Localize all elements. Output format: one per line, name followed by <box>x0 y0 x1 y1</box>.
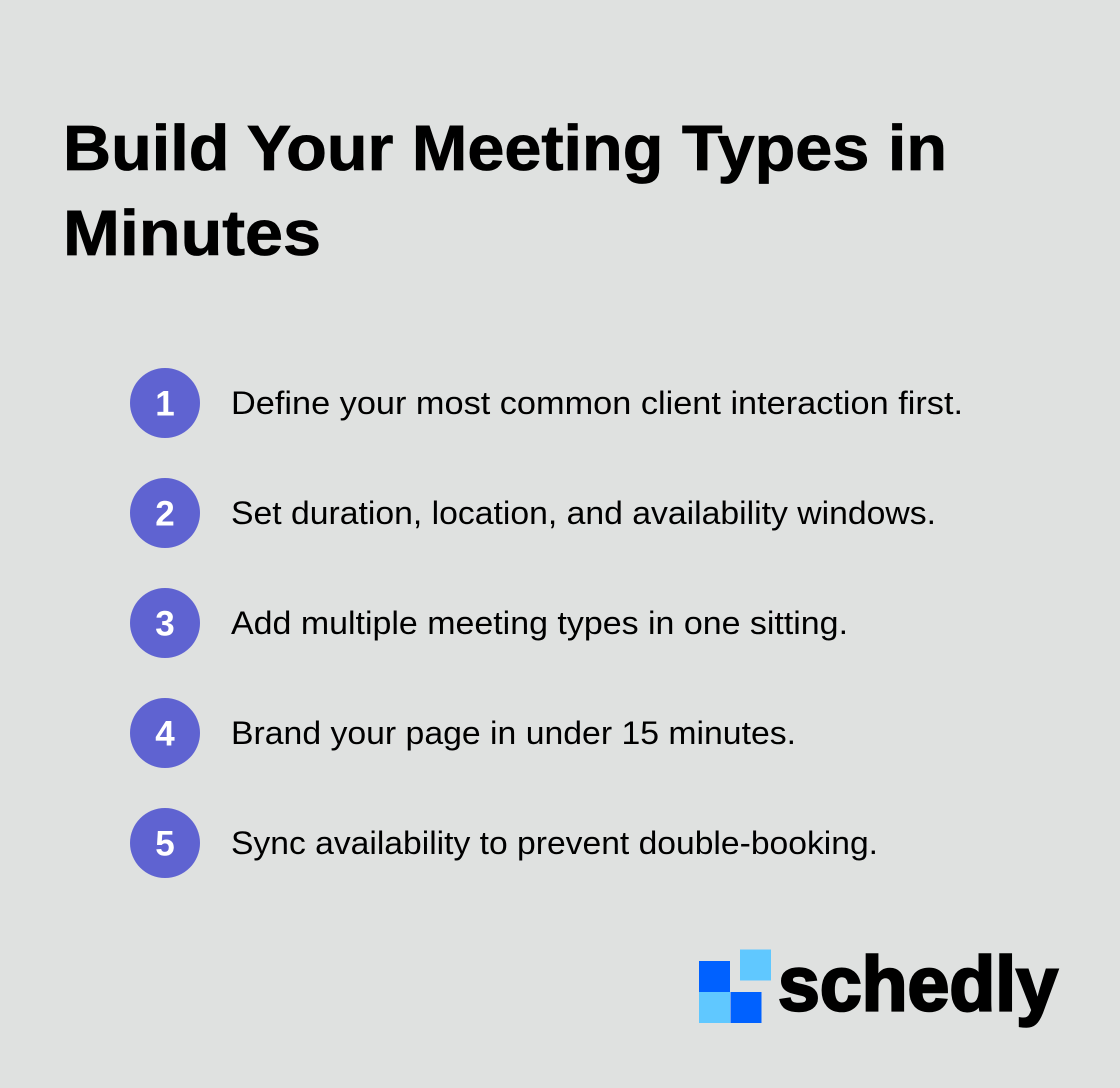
step 1 <box>130 368 963 438</box>
step 2: 2 <box>155 494 175 534</box>
step 5: 5 <box>155 824 175 864</box>
step 4: 4 <box>155 714 175 754</box>
step 5: Sync availability to prevent double-booking. <box>231 825 878 861</box>
step 4: Brand your page in under 15 minutes. <box>231 715 796 751</box>
step 1: 1 <box>155 384 175 424</box>
step 3: 3 <box>155 604 175 644</box>
step 3 <box>130 588 848 658</box>
title: Minutes <box>63 197 321 269</box>
step 1: Define your most common client interaction first. <box>231 385 963 421</box>
step 5 <box>130 808 878 878</box>
step 2 <box>130 478 936 548</box>
icon: logo squares <box>699 950 771 1023</box>
logo wordmark: schedly <box>778 942 1058 1028</box>
logo: schedly <box>699 942 1058 1028</box>
title <box>63 112 947 269</box>
numbered steps list <box>130 368 963 878</box>
step 3: Add multiple meeting types in one sitting. <box>231 605 848 641</box>
step 4 <box>130 698 796 768</box>
title: Build Your Meeting Types in <box>63 112 947 184</box>
step 2: Set duration, location, and availability windows. <box>231 495 936 531</box>
